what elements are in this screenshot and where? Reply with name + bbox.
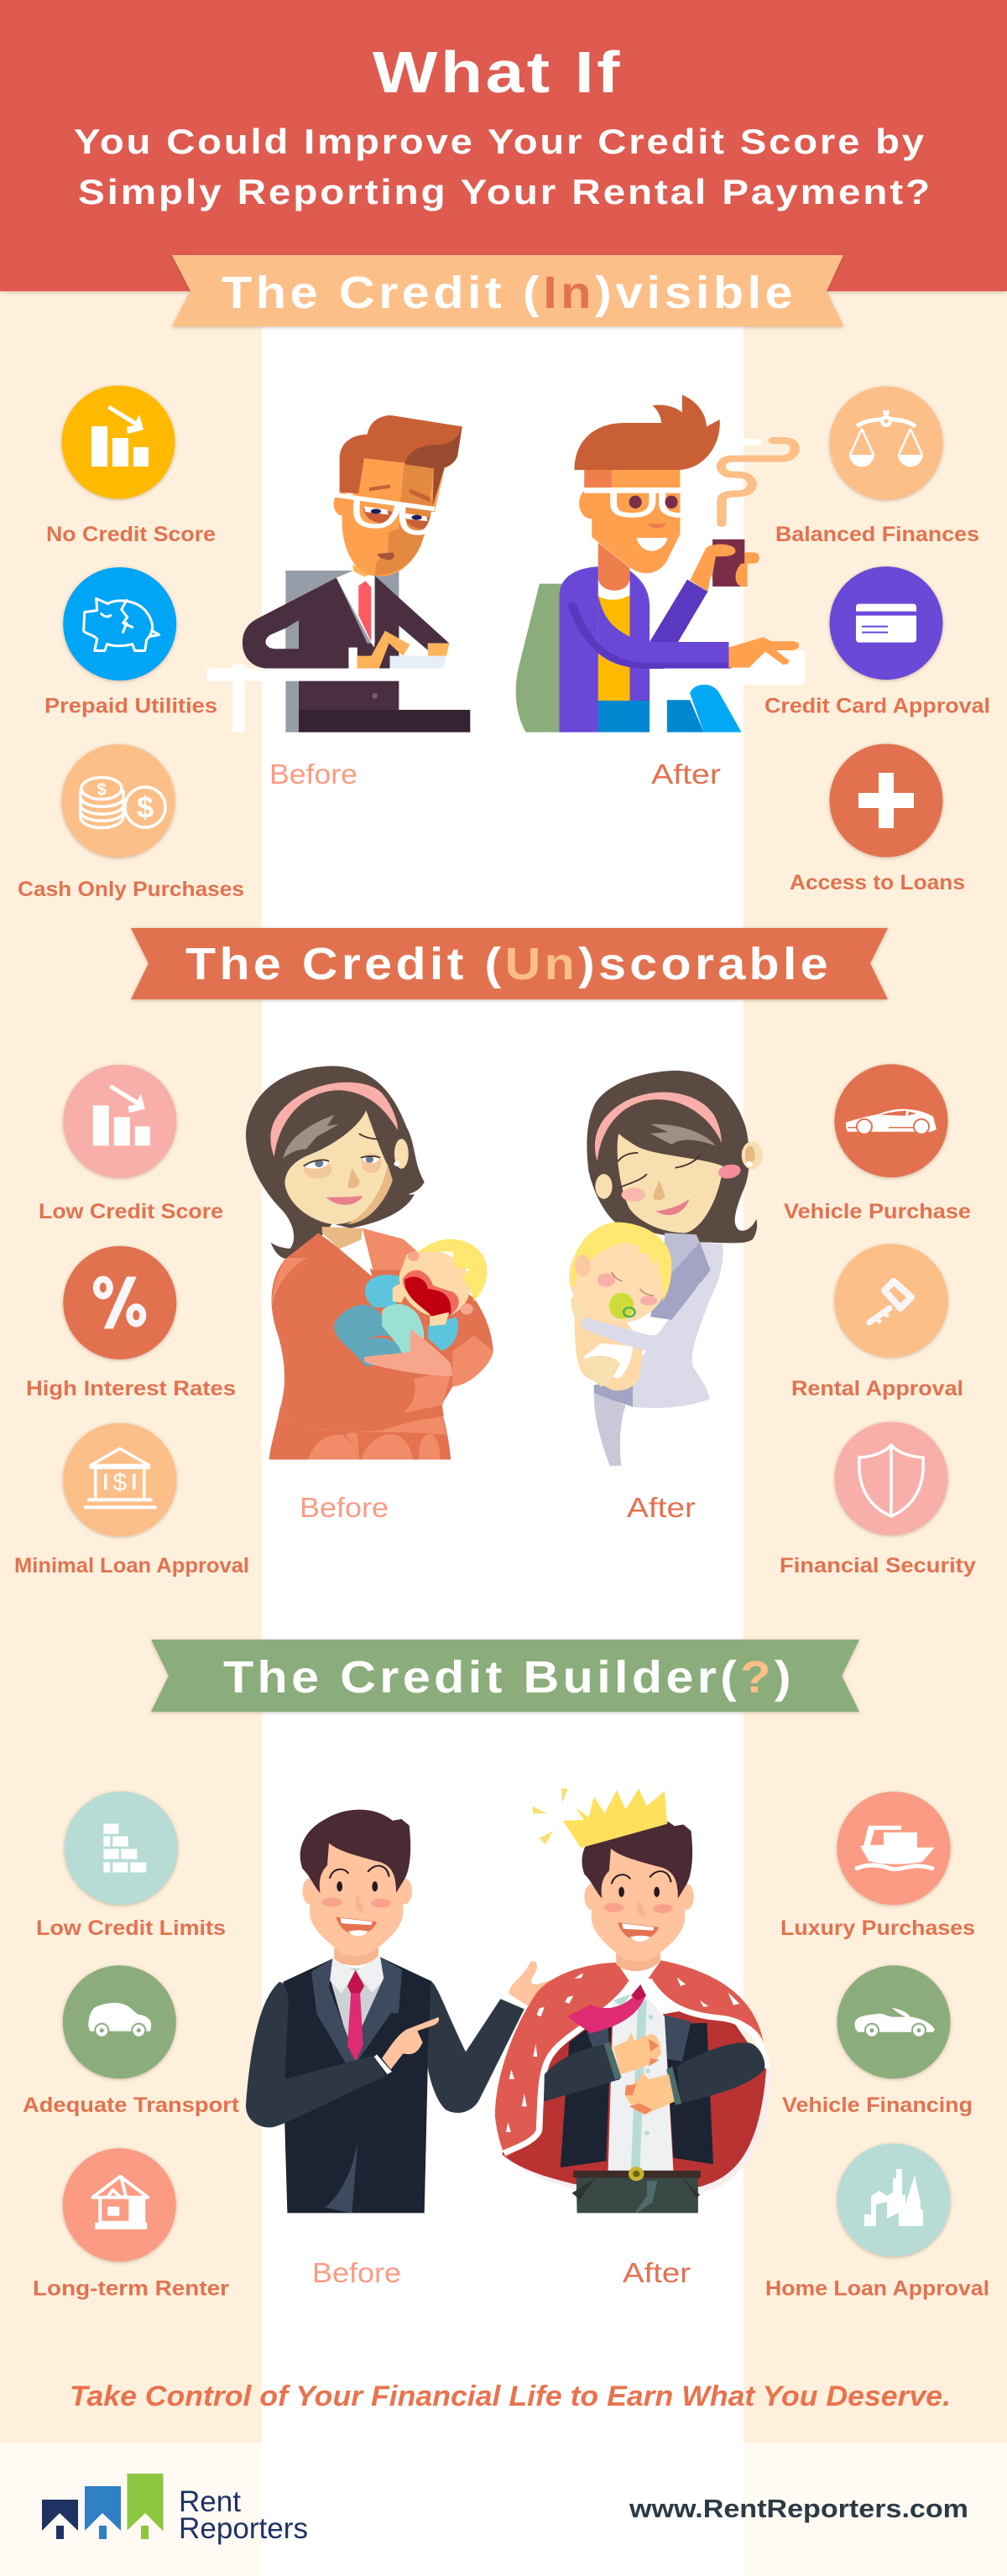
icon: convertible car [837, 1965, 950, 2078]
icon: percent [63, 1246, 176, 1359]
icon: coins: $ [97, 780, 107, 799]
section 3 right column [765, 1791, 989, 2301]
icon: balance scales [829, 386, 943, 500]
section 2 right column [780, 1064, 976, 1577]
subtitle: You Could Improve Your Credit Score by [74, 122, 926, 161]
icon: sports car [834, 1064, 948, 1177]
closing tagline: Take Control of Your Financial Life to Earn What You Deserve. [70, 2380, 951, 2412]
label: Access to Loans [790, 871, 965, 894]
icon: key [834, 1244, 948, 1358]
label: No Credit Score [46, 523, 216, 546]
icon: house frame [63, 2148, 176, 2261]
label: Vehicle Purchase [784, 1200, 971, 1223]
section 1 ribbon: The Credit (In)visible: The Credit ( In)visible [222, 268, 796, 318]
logo bars [41, 2474, 164, 2539]
section 3 after figure: man with crown and cape [495, 1788, 772, 2213]
title: What If [373, 39, 623, 105]
label: Low Credit Score [39, 1200, 223, 1223]
icon: city skyline [837, 2143, 950, 2257]
logo: Rent Reporters [41, 2474, 308, 2545]
section 1 right column [764, 386, 990, 894]
icon: coins: $ [137, 790, 154, 824]
icon: bricks [65, 1791, 178, 1905]
section 3 left column [23, 1791, 240, 2301]
after label: After [627, 1492, 696, 1523]
label: Balanced Finances [775, 523, 979, 546]
label: Adequate Transport [23, 2094, 240, 2117]
section 3 ribbon: The Credit Builder(?): The Credit Builder( ?) [223, 1652, 795, 1703]
before label: Before [269, 759, 357, 790]
label: Luxury Purchases [780, 1916, 975, 1940]
section 1 ribbon: The Credit (In)visible [172, 255, 843, 326]
icon: low credit score chart [63, 1065, 176, 1178]
icon: coins [62, 744, 175, 858]
section 1 before figure: stressed man at desk [207, 415, 470, 733]
label: Minimal Loan Approval [14, 1554, 249, 1577]
section 2 ribbon: The Credit (Un)scorable: The Credit ( Un)scorable [185, 939, 832, 989]
after label: After [651, 759, 721, 790]
icon: no credit score chart [62, 386, 175, 498]
before label: Before [312, 2257, 401, 2288]
label: Long-term Renter [33, 2277, 229, 2301]
label: Home Loan Approval [765, 2277, 989, 2301]
icon: ship [837, 1791, 950, 1905]
section 2 after figure: calm mother with sleeping baby [569, 1071, 763, 1466]
after label: After [623, 2257, 691, 2288]
logo wordmark: Reporters [179, 2512, 308, 2545]
header band [0, 0, 1007, 291]
icon: credit card [829, 566, 943, 680]
label: Financial Security [780, 1554, 976, 1577]
icon: hatchback car [63, 1965, 176, 2078]
section 3 ribbon: The Credit Builder(?) [151, 1640, 859, 1712]
before label: Before [300, 1492, 389, 1523]
section 2 before figure: tired mother with crying baby [246, 1066, 493, 1460]
section 3 before figure: man in suit [246, 1810, 571, 2213]
label: High Interest Rates [26, 1377, 236, 1400]
icon: plus [829, 743, 943, 858]
icon: bank: $ [112, 1468, 127, 1496]
section 1 left column [18, 386, 244, 901]
section 1 after figure: relaxed man with coffee [516, 395, 805, 733]
label: Rental Approval [791, 1377, 963, 1400]
label: Vehicle Financing [782, 2094, 973, 2117]
label: Prepaid Utilities [44, 695, 217, 718]
subtitle: Simply Reporting Your Rental Payment? [78, 172, 932, 211]
section 2 left column [14, 1065, 249, 1577]
icon: broken piggy bank [63, 567, 176, 681]
icon: shield [834, 1421, 948, 1536]
subtitle [74, 122, 932, 211]
logo wordmark [179, 2485, 308, 2545]
section 2 ribbon: The Credit (Un)scorable [131, 928, 888, 999]
label: Cash Only Purchases [18, 878, 244, 901]
website url: www.RentReporters.com [629, 2494, 968, 2523]
icon: bank [63, 1423, 176, 1536]
label: Credit Card Approval [764, 695, 990, 718]
label: Low Credit Limits [36, 1916, 226, 1940]
logo wordmark: Rent [179, 2485, 241, 2518]
